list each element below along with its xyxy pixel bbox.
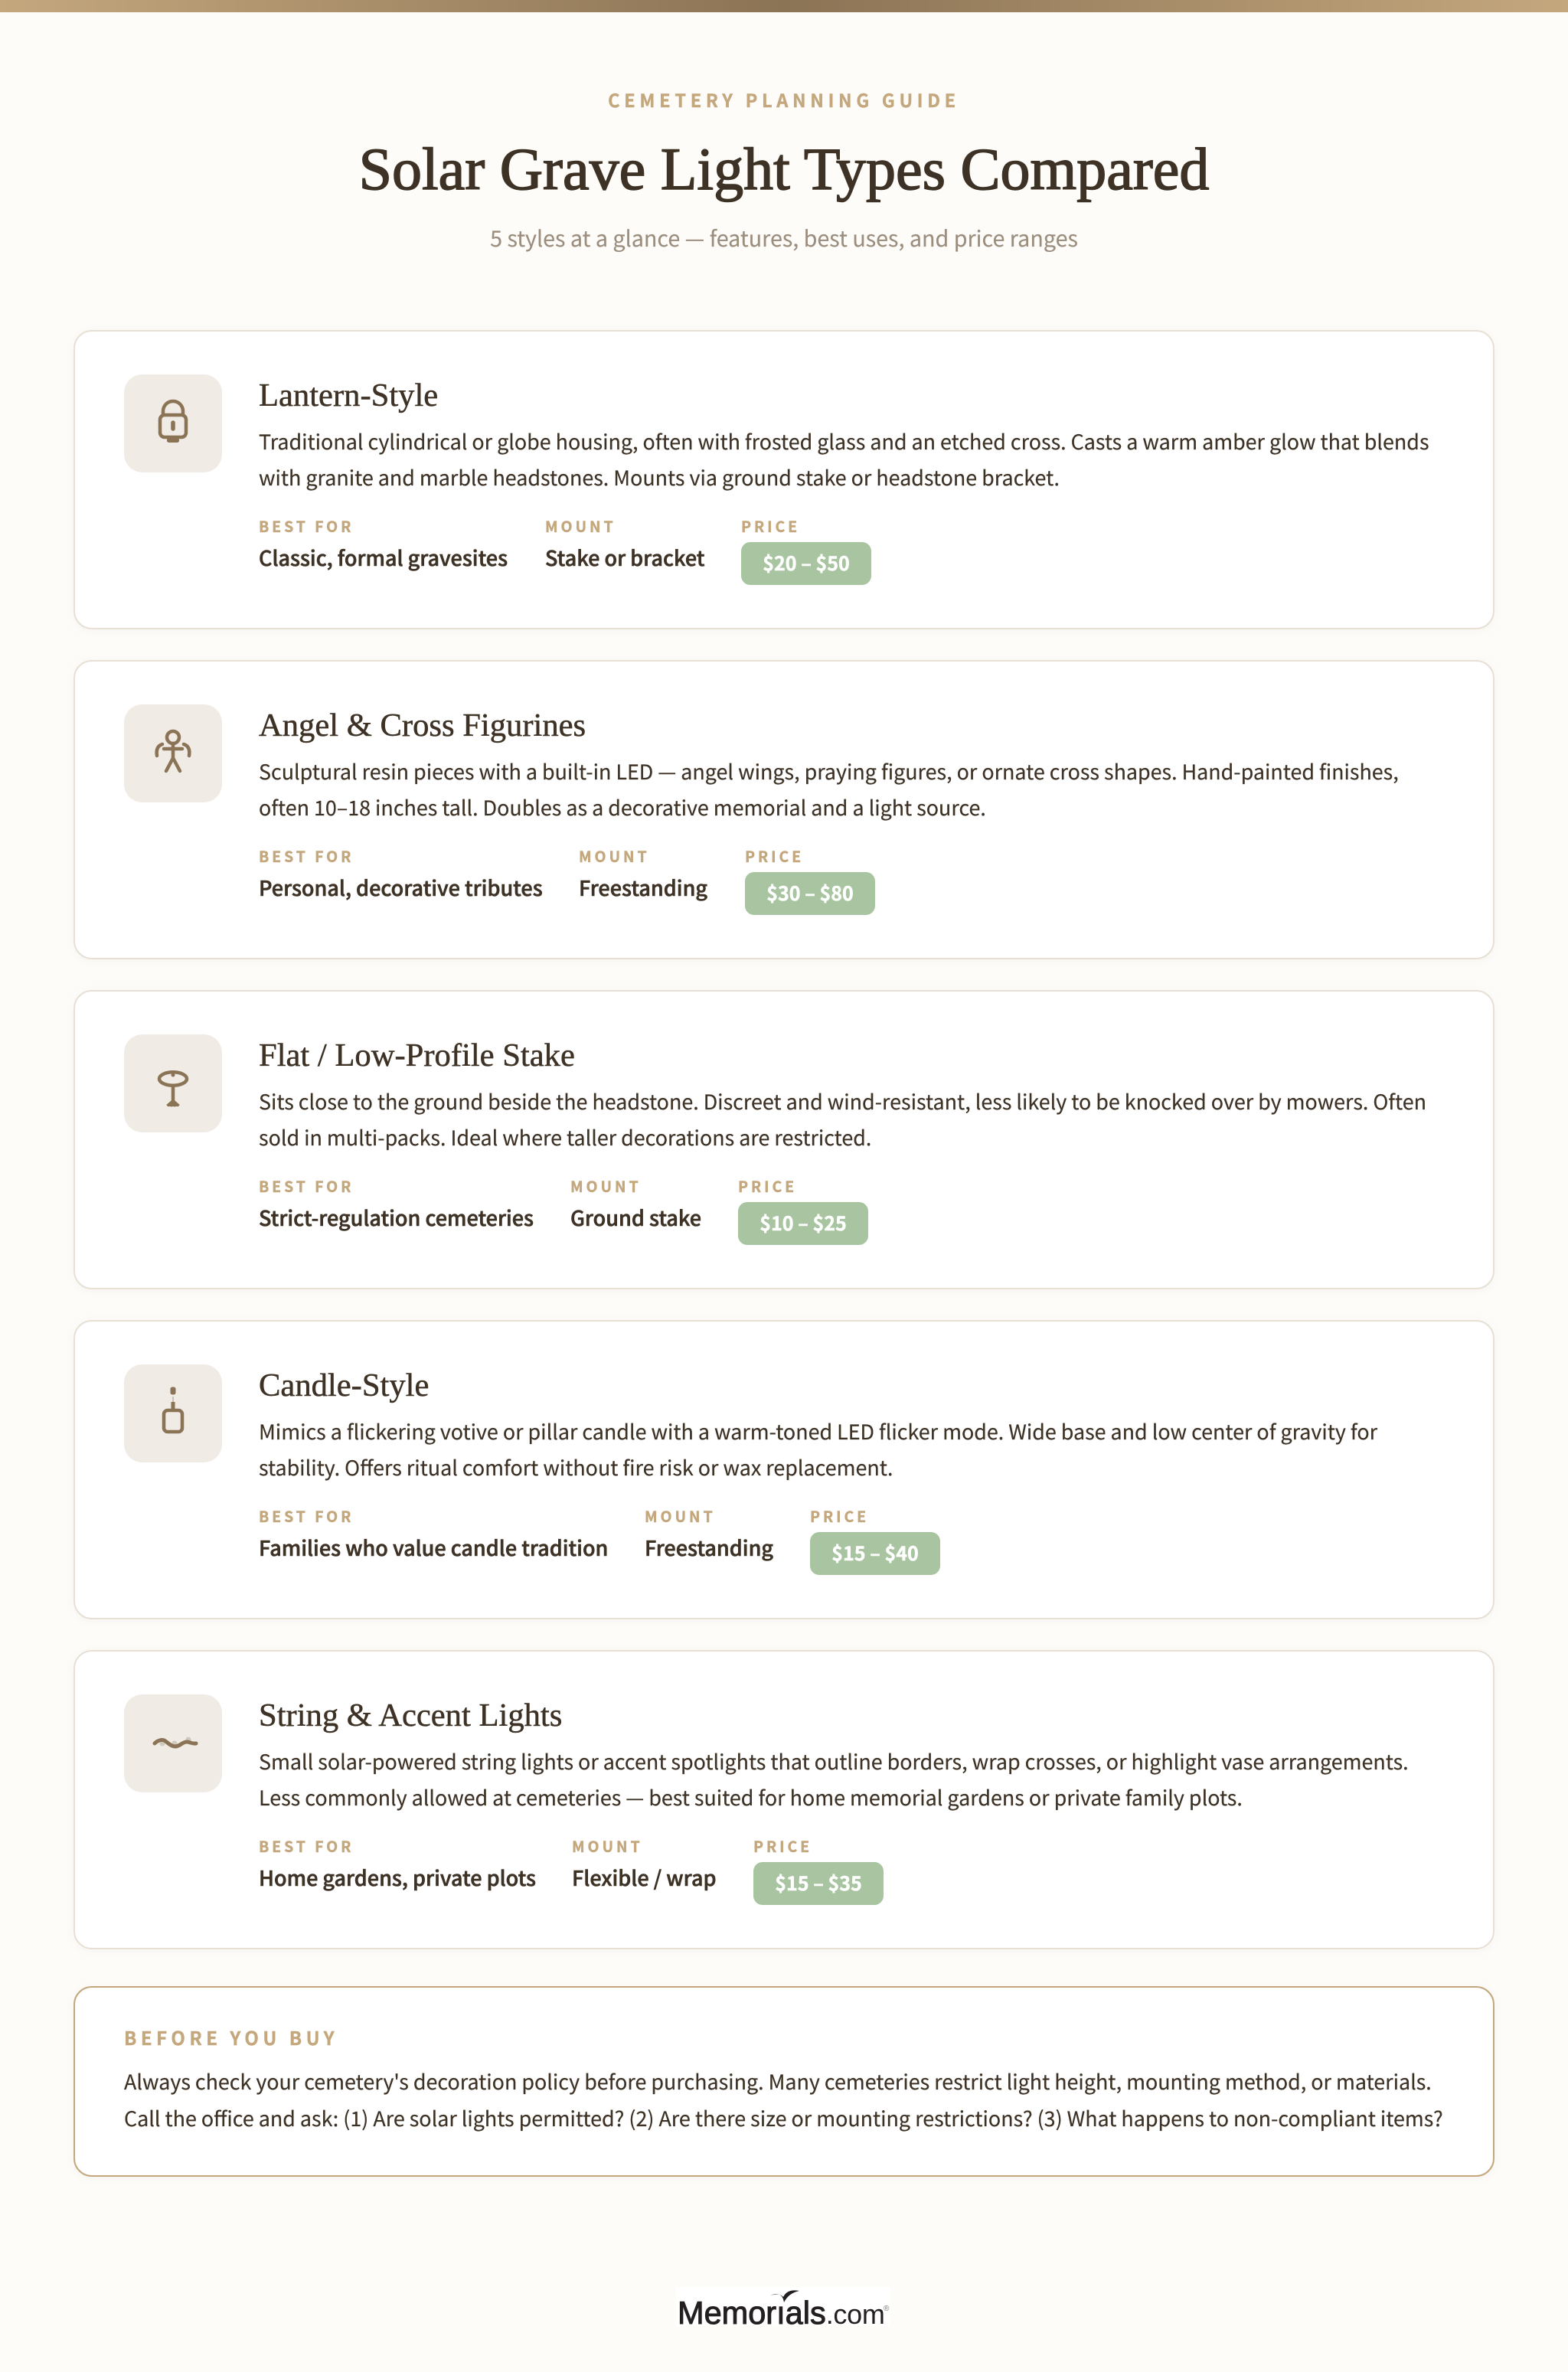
label: mount: MOUNT [545, 515, 616, 537]
card title: Flat / Low-Profile Stake [259, 1037, 575, 1073]
value: mount: Flexible / wrap [572, 1862, 717, 1892]
description: Small solar-powered string lights or accent spotlights that outline borders, wrap crosses, or highlight vase arrangements. [259, 1746, 1409, 1776]
registered mark: ® [884, 2305, 889, 2313]
label: best for: BEST FOR [259, 845, 354, 867]
logo bird [772, 2290, 799, 2302]
card title: String & Accent Lights [259, 1697, 562, 1733]
description: stability. Offers ritual comfort without fire risk or wax replacement. [259, 1452, 893, 1482]
description: with granite and marble headstones. Mounts via ground stake or headstone bracket. [259, 462, 1060, 492]
value: mount: Stake or bracket [545, 542, 704, 572]
description [259, 1416, 1378, 1482]
description: Less commonly allowed at cemeteries — best suited for home memorial gardens or private family plots. [259, 1782, 1243, 1812]
panel: string and accent lights [74, 1650, 1494, 1949]
description: sold in multi-packs. Ideal where taller decorations are restricted. [259, 1122, 871, 1152]
panel: lantern-style [74, 330, 1494, 629]
callout heading: BEFORE YOU BUY [124, 2024, 338, 2050]
icon: string lights [124, 1694, 222, 1792]
value: best for: Home gardens, private plots [259, 1862, 536, 1892]
price badge [745, 872, 875, 915]
description [259, 426, 1429, 492]
price badge [753, 1862, 884, 1905]
price badge: $20 – $50 [763, 549, 850, 577]
price badge: $10 – $25 [760, 1209, 847, 1237]
icon: candle [124, 1364, 222, 1462]
label: price: PRICE [738, 1175, 797, 1197]
top accent bar [0, 0, 1568, 12]
callout text: Call the office and ask: (1) Are solar lights permitted? (2) Are there size or mounting restrictions? (3) What happens to non-compliant items? [124, 2102, 1443, 2132]
panel: angel and cross figurines [74, 660, 1494, 959]
description: often 10–18 inches tall. Doubles as a decorative memorial and a light source. [259, 792, 986, 822]
value: best for: Classic, formal gravesites [259, 542, 508, 572]
value: mount: Freestanding [645, 1532, 773, 1562]
label: price: PRICE [753, 1835, 812, 1857]
label: mount: MOUNT [579, 845, 650, 867]
card title: Angel & Cross Figurines [259, 707, 586, 743]
panel: candle-style [74, 1320, 1494, 1619]
description: Traditional cylindrical or globe housing, often with frosted glass and an etched cross. Casts a warm amber glow that blends [259, 426, 1429, 456]
value: best for: Strict-regulation cemeteries [259, 1202, 534, 1232]
eyebrow: CEMETERY PLANNING GUIDE [608, 87, 960, 113]
price badge: $30 – $80 [766, 879, 854, 907]
icon: angel [124, 704, 222, 802]
callout text [124, 2066, 1443, 2132]
description: Sculptural resin pieces with a built-in LED — angel wings, praying figures, or ornate cross shapes. Hand-painted finishes, [259, 756, 1399, 786]
label: mount: MOUNT [645, 1505, 716, 1527]
callout text: Always check your cemetery's decoration policy before purchasing. Many cemeteries restrict light height, mounting method, or materials. [124, 2066, 1432, 2096]
callout: before you buy [74, 1986, 1494, 2177]
description: Sits close to the ground beside the headstone. Discreet and wind-resistant, less likely to be knocked over by mowers. Often [259, 1086, 1426, 1116]
card title: Lantern-Style [259, 377, 438, 413]
title: Solar Grave Light Types Compared [359, 136, 1209, 202]
description: Mimics a flickering votive or pillar candle with a warm-toned LED flicker mode. Wide base and low center of gravity for [259, 1416, 1377, 1446]
price badge [810, 1532, 940, 1575]
price badge [741, 542, 871, 585]
icon: lantern [124, 374, 222, 472]
label: best for: BEST FOR [259, 1175, 354, 1197]
label: price: PRICE [810, 1505, 869, 1527]
label: best for: BEST FOR [259, 1505, 354, 1527]
subtitle: 5 styles at a glance — features, best uses, and price ranges [490, 222, 1078, 253]
value: best for: Families who value candle tradition [259, 1532, 608, 1562]
label: price: PRICE [741, 515, 800, 537]
label: price: PRICE [745, 845, 804, 867]
value: best for: Personal, decorative tributes [259, 872, 543, 902]
label: best for: BEST FOR [259, 515, 354, 537]
label: mount: MOUNT [572, 1835, 643, 1857]
label: mount: MOUNT [570, 1175, 642, 1197]
description [259, 1746, 1409, 1812]
description [259, 1086, 1426, 1152]
value: mount: Freestanding [579, 872, 707, 902]
value: mount: Ground stake [570, 1202, 701, 1232]
description [259, 756, 1399, 822]
icon: stake [124, 1034, 222, 1132]
logo: Memorials.com [676, 2287, 890, 2326]
label: best for: BEST FOR [259, 1835, 354, 1857]
price badge: $15 – $35 [775, 1869, 862, 1897]
card title: Candle-Style [259, 1367, 429, 1403]
price badge: $15 – $40 [831, 1539, 919, 1567]
price badge [738, 1202, 868, 1245]
panel: flat low-profile stake [74, 990, 1494, 1289]
